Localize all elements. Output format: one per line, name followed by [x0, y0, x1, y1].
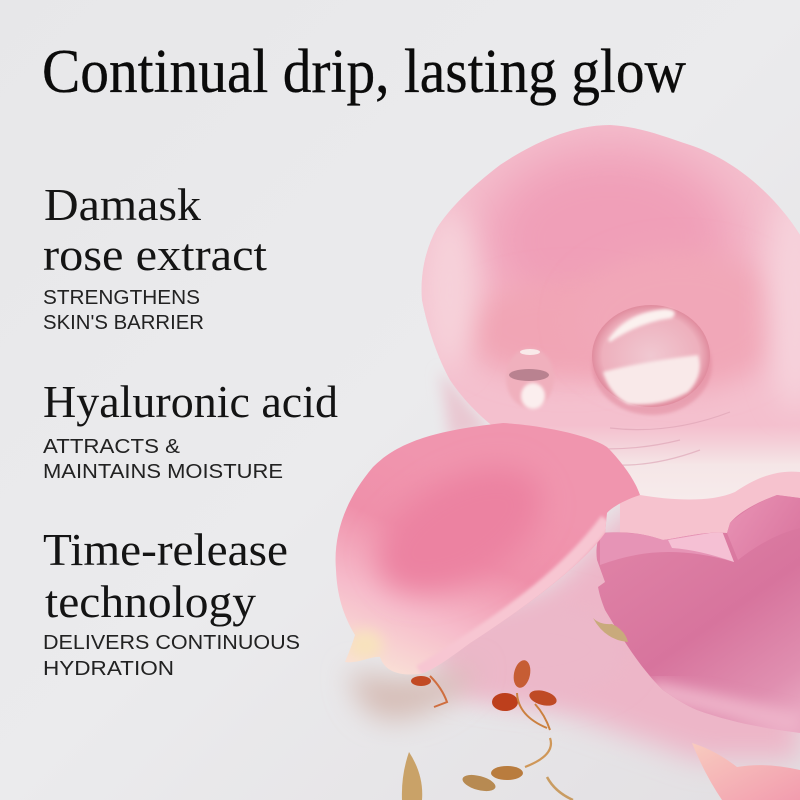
large petal — [410, 115, 800, 510]
photo: rose petals and droplets — [325, 115, 800, 800]
feature: Hyaluronic acid: MAINTAINS MOISTURE — [43, 461, 283, 483]
stamen under petal — [430, 676, 447, 707]
feature: Damask rose extract — [43, 179, 267, 334]
filament — [525, 738, 551, 767]
feature: Damask rose extract: Damask — [44, 179, 201, 230]
feature: Hyaluronic acid: ATTRACTS & — [43, 436, 181, 458]
large water droplet — [592, 305, 712, 415]
title: Continual drip, lasting glow — [42, 38, 686, 106]
shadow under middle petal — [350, 665, 480, 720]
feature: Damask rose extract: STRENGTHENS — [43, 287, 200, 309]
feature: Hyaluronic acid — [43, 376, 338, 483]
back right petal — [590, 490, 800, 740]
dried stamens — [402, 659, 573, 800]
feature: Damask rose extract: SKIN'S BARRIER — [43, 312, 204, 334]
feature: Time-release technology: technology — [45, 576, 256, 627]
middle petal — [336, 423, 640, 674]
feature: Time-release technology: DELIVERS CONTINUOUS — [43, 632, 300, 654]
feature: Damask rose extract: rose extract — [43, 229, 267, 280]
orange stamen cluster — [511, 659, 533, 689]
small brown bud — [593, 618, 628, 642]
bottom right petal fragment — [692, 743, 800, 800]
feature: Hyaluronic acid: Hyaluronic acid — [43, 376, 338, 427]
feature: Time-release technology — [43, 524, 300, 680]
seeds — [491, 766, 523, 780]
feature: Time-release technology: HYDRATION — [43, 658, 174, 680]
feature: Time-release technology: Time-release — [43, 524, 288, 575]
small water droplet — [506, 348, 554, 409]
